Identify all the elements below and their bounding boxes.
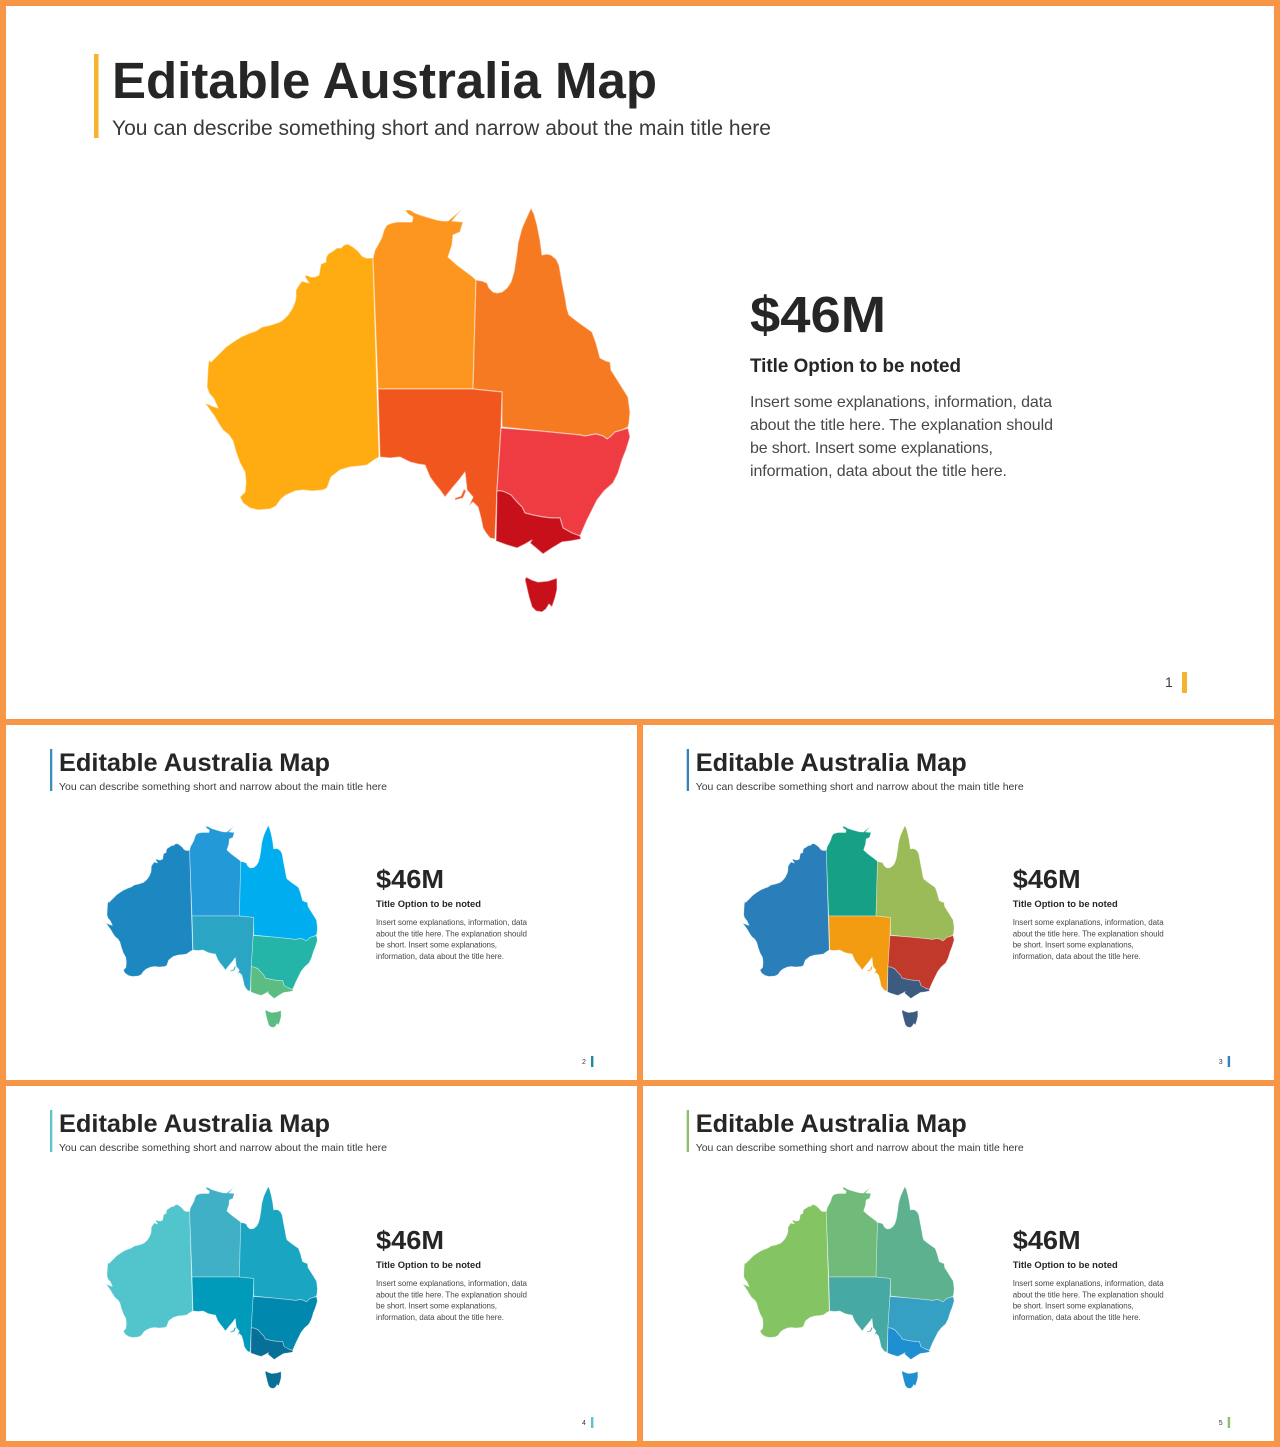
page number: 3 (1219, 1059, 1223, 1066)
map: teal Australia (106, 1186, 317, 1388)
state: South Australia (829, 916, 890, 991)
map: multicolour Australia (743, 826, 954, 1028)
state: Northern Territory (190, 1187, 241, 1277)
body text: Insert some explanations, information, data (376, 918, 528, 927)
big number: $46M (1013, 1227, 1081, 1255)
option title: Title Option to be noted (376, 899, 481, 910)
map: blue Australia (106, 826, 317, 1028)
body text: be short. Insert some explanations, (376, 940, 497, 950)
option title: Title Option to be noted (1013, 1260, 1118, 1271)
page number: 5 (1219, 1420, 1223, 1427)
body text (376, 918, 528, 961)
state: Northern Territory (373, 209, 476, 389)
body text: about the title here. The explanation should (376, 930, 527, 938)
body text (750, 394, 1053, 480)
state: Tasmania (902, 1010, 918, 1028)
state: Queensland (473, 208, 630, 439)
body text: Insert some explanations, information, data (750, 394, 1052, 411)
state: Tasmania (265, 1371, 281, 1388)
title: Editable Australia Map (696, 749, 967, 777)
panel: slide 3 multicolour map (687, 749, 1230, 1067)
body text (376, 1279, 528, 1322)
map: green Australia (743, 1186, 954, 1388)
body text: about the title here. The explanation should (1013, 930, 1164, 938)
body text (1013, 1279, 1164, 1322)
state: Western Australia (205, 244, 379, 510)
subtitle: You can describe something short and narrow about the main title here (112, 117, 771, 140)
panel: slide 5 green map (687, 1110, 1230, 1428)
title accent bar (94, 54, 98, 138)
state: Victoria (496, 491, 581, 554)
state: Queensland (239, 1186, 317, 1302)
page number: 4 (582, 1420, 586, 1427)
state: Queensland (876, 1186, 954, 1302)
body text: be short. Insert some explanations, (376, 1302, 497, 1310)
subtitle: You can describe something short and narrow about the main title here (59, 781, 387, 793)
state: New South Wales (888, 1296, 954, 1350)
state: Western Australia (106, 844, 193, 976)
state: Tasmania (525, 577, 557, 612)
panel: slide 2 blue map (50, 749, 593, 1067)
state: South Australia (192, 1277, 254, 1352)
title: Editable Australia Map (59, 1110, 330, 1138)
body text: information, data about the title here. (1013, 952, 1141, 961)
page number: 1 (1165, 674, 1173, 690)
title: Editable Australia Map (112, 52, 657, 109)
page accent bar (1182, 672, 1187, 693)
state: Northern Territory (826, 1187, 878, 1277)
body text: information, data about the title here. (376, 1313, 504, 1322)
big number: $46M (376, 866, 444, 894)
subtitle: You can describe something short and narrow about the main title here (696, 781, 1024, 793)
state: New South Wales (497, 428, 630, 536)
panel: slide 1 warm map (94, 52, 1187, 693)
page accent bar (1228, 1056, 1230, 1067)
state: South Australia (378, 389, 502, 539)
title accent bar (687, 749, 689, 791)
big number: $46M (750, 286, 886, 343)
option title: Title Option to be noted (750, 356, 961, 377)
state: Victoria (887, 1328, 930, 1360)
state: Tasmania (902, 1371, 918, 1388)
state: Queensland (239, 826, 317, 941)
body text: Insert some explanations, information, data (1013, 1279, 1164, 1288)
page accent bar (591, 1417, 593, 1428)
body text: information, data about the title here. (750, 463, 1007, 480)
body text: about the title here. The explanation should (750, 417, 1053, 434)
body text: be short. Insert some explanations, (750, 440, 993, 457)
page accent bar (1228, 1417, 1230, 1428)
body text: about the title here. The explanation should (376, 1290, 527, 1300)
page number: 2 (582, 1059, 586, 1066)
body text: be short. Insert some explanations, (1013, 940, 1134, 950)
state: Victoria (251, 967, 293, 998)
state: Northern Territory (190, 826, 241, 916)
state: Victoria (251, 1328, 293, 1360)
subtitle: You can describe something short and narrow about the main title here (696, 1142, 1024, 1154)
map: warm Australia (205, 208, 630, 612)
body text (1013, 918, 1164, 961)
state: South Australia (829, 1277, 890, 1352)
body text: information, data about the title here. (1013, 1313, 1141, 1322)
body text: be short. Insert some explanations, (1013, 1302, 1134, 1310)
big number: $46M (1013, 866, 1081, 894)
state: Western Australia (743, 844, 829, 976)
state: Northern Territory (826, 826, 878, 916)
option title: Title Option to be noted (1013, 899, 1118, 910)
state: Queensland (876, 826, 954, 941)
body text: Insert some explanations, information, data (1013, 918, 1164, 927)
state: New South Wales (251, 1296, 317, 1350)
body text: Insert some explanations, information, data (376, 1279, 528, 1288)
state: Tasmania (265, 1010, 281, 1028)
state: Western Australia (743, 1204, 829, 1338)
panel: slide 4 teal map (50, 1110, 593, 1428)
option title: Title Option to be noted (376, 1260, 481, 1271)
big number: $46M (376, 1227, 444, 1255)
body text: information, data about the title here. (376, 952, 504, 961)
subtitle: You can describe something short and narrow about the main title here (59, 1142, 387, 1154)
title accent bar (687, 1110, 689, 1152)
body text: about the title here. The explanation should (1013, 1290, 1164, 1300)
state: South Australia (192, 916, 254, 991)
page accent bar (591, 1056, 593, 1067)
state: Victoria (887, 967, 930, 998)
state: Western Australia (106, 1204, 193, 1338)
state: New South Wales (888, 936, 954, 990)
title accent bar (50, 749, 52, 791)
title: Editable Australia Map (696, 1110, 967, 1138)
state: New South Wales (251, 936, 317, 990)
title: Editable Australia Map (59, 749, 330, 777)
title accent bar (50, 1110, 52, 1152)
